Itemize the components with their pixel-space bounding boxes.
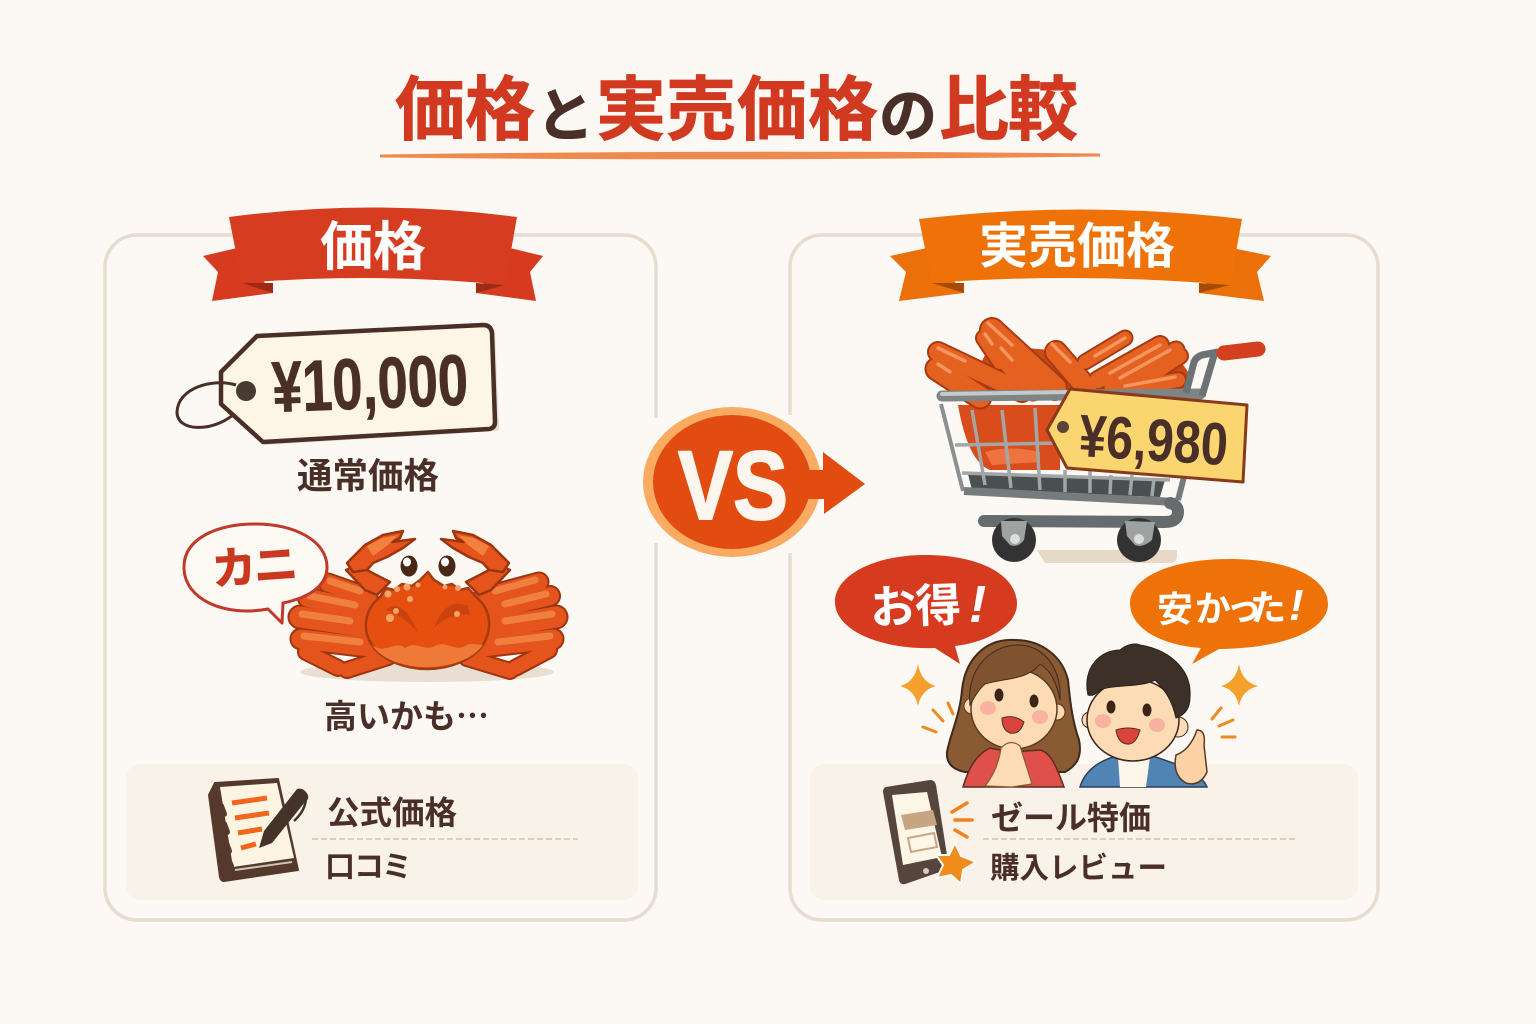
crab legs [937,323,1180,397]
price tag: 10000 yen [177,325,499,445]
title: の [879,84,937,149]
ribbon text: price: 価格 [320,218,426,277]
label: regular price: 通常価格 [297,456,439,496]
caption: maybe expensive: 高いかも… [324,690,489,738]
speech bubble: it was cheap: ! [1289,581,1304,630]
character: woman [947,640,1080,787]
ribbon text: actual price: 実売価格 [979,220,1175,274]
price tag: 6980 yen: ¥6,980 [1077,402,1230,478]
title: 価格 [395,71,535,149]
speech bubble: it was cheap: 安かった [1157,587,1286,630]
speech bubble: crab [184,524,327,623]
icon: notebook and pen [209,779,308,881]
cart shadow [1037,550,1177,563]
VS text: VS [678,431,788,540]
text: sale price: ゼール特価 [991,800,1151,836]
speech bubble: crab: カニ [210,540,300,595]
price tag: 6980 yen [1047,389,1247,482]
title: 実売価格 [596,71,878,149]
cart frame [984,503,1178,522]
text: purchase reviews: 購入レビュー [990,852,1167,885]
title [380,71,1100,158]
speech bubble: it was cheap [1130,559,1328,664]
VS badge with arrow [643,407,865,557]
title: 比較 [939,71,1078,149]
price text: ¥10,000 [271,341,469,428]
speech bubble: good deal: ! [969,576,986,634]
ribbon: price [203,208,543,301]
character: man [1080,644,1207,787]
title: と [536,84,594,149]
wheels [992,518,1036,562]
panel: actual price [784,235,1378,920]
icon: smartphone with star [884,781,976,884]
panel: price [105,235,662,920]
shopping cart with crab legs and tag [937,323,1258,563]
crab illustration [184,524,556,682]
speech bubble: good deal: お得 [869,579,962,634]
footer band: actual price [810,764,1358,900]
speech bubble: good deal [835,555,1017,664]
cart handle [1186,352,1218,396]
text: word of mouth: 口コミ [325,851,412,884]
cart basket [941,400,1204,502]
footer band: price [126,764,638,900]
ribbon: actual price [890,210,1271,301]
text: official price: 公式価格 [327,795,457,831]
sparkles and rays [900,664,1258,737]
